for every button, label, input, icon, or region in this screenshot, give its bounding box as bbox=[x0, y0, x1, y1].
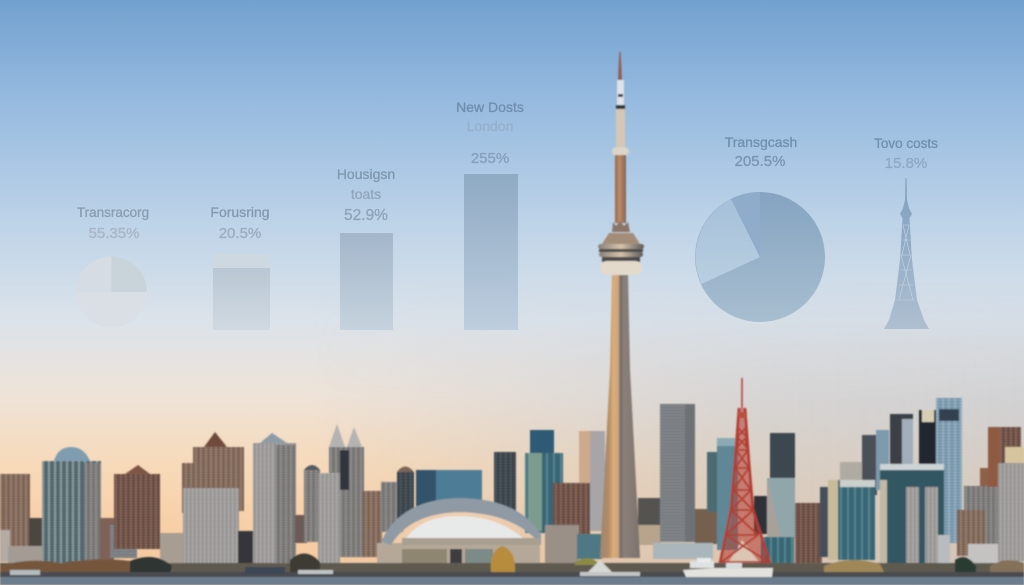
chart: Transracorg pie: Transracorg bbox=[77, 205, 149, 220]
chart: New Dosts bar: London bbox=[467, 118, 513, 134]
chart: Transracorg pie: 55.35% bbox=[89, 225, 139, 242]
chart: Tovo costs tower icon: 15.8% bbox=[885, 155, 927, 172]
chart: Transgcash pie bbox=[695, 134, 825, 322]
chart: Forusring bar: 20.5% bbox=[219, 225, 261, 242]
central towers bbox=[416, 404, 768, 563]
trees and shoreline bbox=[0, 546, 1024, 577]
chart: Housing costs bar: 52.9% bbox=[344, 207, 388, 224]
water bbox=[0, 577, 1024, 585]
chart: Transracorg pie bbox=[76, 205, 149, 328]
chart: Transgcash pie: Transgcash bbox=[725, 134, 797, 150]
chart: New Dosts bar bbox=[456, 99, 524, 330]
chart: New Dosts bar: 255% bbox=[471, 150, 509, 167]
red lattice tower bbox=[720, 378, 770, 563]
chart: Tovo costs tower icon: Tovo costs bbox=[874, 136, 938, 151]
chart: Housing costs bar: Housigsn bbox=[337, 166, 395, 182]
chart: New Dosts bar: New Dosts bbox=[456, 99, 524, 115]
stadium dome bbox=[377, 498, 541, 573]
chart: Tovo costs tower icon bbox=[874, 136, 938, 329]
chart: Forusring bar: Forusring bbox=[210, 204, 270, 220]
right waterfront towers bbox=[761, 398, 1024, 572]
chart: Housing costs bar bbox=[337, 166, 395, 330]
chart: Transgcash pie: 205.5% bbox=[735, 153, 785, 170]
left waterfront towers bbox=[0, 424, 414, 570]
CN tower bbox=[598, 52, 644, 558]
chart: Housing costs bar: toats bbox=[351, 186, 381, 202]
chart: Forusring bar bbox=[210, 204, 270, 330]
ferry bbox=[683, 558, 773, 577]
